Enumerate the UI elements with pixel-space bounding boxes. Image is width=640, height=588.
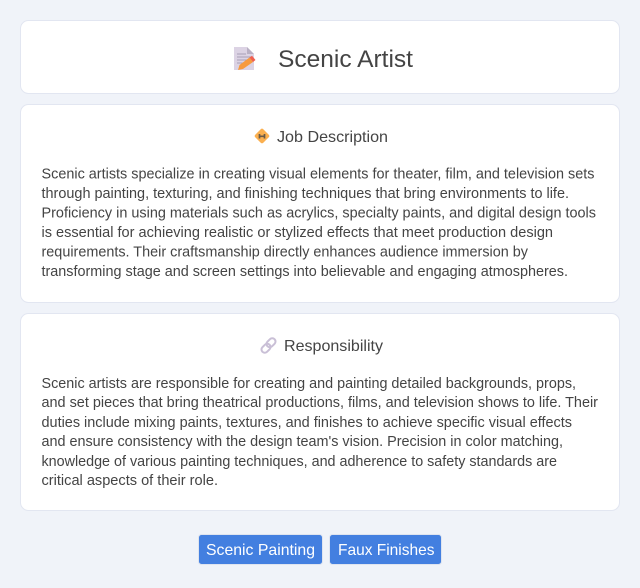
icon: chain link	[260, 337, 277, 354]
heading: Scenic Artist: Scenic Artist	[278, 46, 413, 73]
tag: Faux Finishes	[330, 534, 442, 564]
panel: job description	[20, 104, 620, 302]
text block: responsibility body: Scenic artists are responsible for creating and painting detailed backgrounds, props,	[42, 376, 576, 392]
icon: document with pencil	[234, 47, 256, 70]
panel: title	[20, 20, 620, 94]
text block: responsibility body: and set pieces that bring theatrical productions, films, and television shows to life. Their	[42, 395, 598, 411]
text block: responsibility body: critical aspects of their role.	[42, 473, 218, 489]
text block: job description body: Proficiency in using materials such as acrylics, specialty paints, and digital design tools	[42, 206, 596, 222]
tag: Scenic Painting	[198, 534, 322, 564]
text block: job description body: Scenic artists specialize in creating visual elements for theater, film, and television sets	[42, 166, 594, 182]
text block: job description body: is essential for achieving realistic or stylized effects that meet production design	[42, 225, 553, 241]
text block: job description body: through painting, texturing, and finishing techniques that bring environments to life.	[42, 186, 569, 202]
text block: responsibility body	[42, 376, 598, 489]
text block: responsibility body: duties include mixing paints, textures, and finishes to achieve specific visual effects	[42, 415, 572, 431]
text block: job description body	[42, 166, 596, 280]
text block: responsibility body: and ensure consistency with the design team's vision. Precision in color matching,	[42, 434, 563, 450]
heading: Responsibility: Responsibility	[284, 338, 383, 355]
heading: Job Description: Job Description	[277, 129, 388, 146]
text block: responsibility body: knowledge of various painting techniques, and adherence to safety standards are	[42, 454, 557, 470]
text block: job description body: requirements. Their craftsmanship directly enhances audience immersion by	[42, 244, 529, 260]
text block: job description body: transforming stage and screen settings into believable and engaging atmospheres.	[42, 264, 568, 280]
panel: responsibility	[20, 314, 620, 510]
tag: Faux Finishes: Faux Finishes	[338, 542, 434, 559]
tag: Scenic Painting: Scenic Painting	[206, 542, 315, 559]
icon: amber diamond sign	[254, 128, 270, 144]
